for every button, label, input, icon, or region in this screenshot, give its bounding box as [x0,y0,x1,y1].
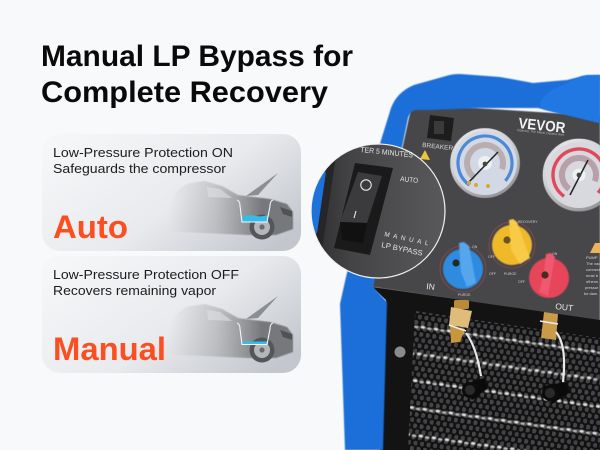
yellow valve knob [489,219,535,268]
port labels [426,281,574,313]
title [41,40,353,109]
red valve knob [529,253,569,298]
car illustration: manual [168,296,293,362]
high pressure gauge [542,138,600,212]
screw [394,346,406,358]
perforated mesh [408,311,600,450]
valve position labels: ON [472,245,478,249]
brand logo: Operate The Metal Double Wet [517,128,564,137]
recovery machine [340,74,600,450]
refrigerant tank: nearly full level [237,200,273,222]
label: Manual: Manual [53,331,166,367]
valve position labels: RECOVERY [518,220,538,224]
breaker switch [422,115,454,152]
control panel [372,104,600,322]
valve position labels: PURGE [458,293,471,297]
valve position labels: OFF [518,280,525,284]
panel: manual mode [42,256,301,373]
low pressure gauge [447,125,523,201]
refrigerant tank: low level [237,323,273,344]
warning note: pressur [585,285,599,290]
inset labels: TER 5 MINUTES [360,145,413,160]
warning note: be dam [584,291,598,296]
description: auto: Low-Pressure Protection ON [53,145,233,160]
panel: auto mode [42,134,301,251]
brand logo: VEVOR [518,115,566,137]
magnified inset: LP bypass switch [305,144,445,278]
title: Complete Recovery [41,76,328,109]
OUT brass port and wire [540,312,564,382]
valve position labels: OFF [489,272,496,276]
inset labels [360,145,429,258]
description: manual: Recovers remaining vapor [53,283,217,298]
description: manual: Low-Pressure Protection OFF [53,267,239,282]
rocker switch [334,163,393,255]
warning triangle [420,150,430,160]
port labels: OUT [555,301,574,313]
IN brass port and wire [449,300,481,376]
warning note: most b [586,273,599,278]
warning note: connect [586,267,600,272]
warning note: PUMP [586,255,598,260]
blue housing frame [340,74,600,450]
inset labels: AUTO [400,176,419,185]
valve position labels: PURGE [504,272,517,276]
valve position labels: OFF [488,255,495,259]
inset labels: LP BYPASS [381,240,424,258]
inset labels: MANUAL [384,231,429,247]
valve position labels [458,220,558,297]
blue valve knob [440,242,486,292]
OUT hose socket [542,382,570,404]
port labels: IN [426,281,435,292]
black grille frame [372,287,600,450]
description: auto: Safeguards the compressor [53,161,227,176]
IN hose socket [462,378,488,400]
car illustration: auto [168,173,293,240]
description: auto [53,145,233,176]
warning note [584,243,600,296]
title: Manual LP Bypass for [41,40,353,73]
valve position labels: ON [552,252,558,256]
blue top lid [540,75,600,123]
breaker switch: BREAKER [422,142,454,152]
label: Auto: Auto [53,209,128,245]
description: manual [53,267,239,298]
warning note: otherw [586,279,598,284]
warning note: The vac [586,261,600,266]
